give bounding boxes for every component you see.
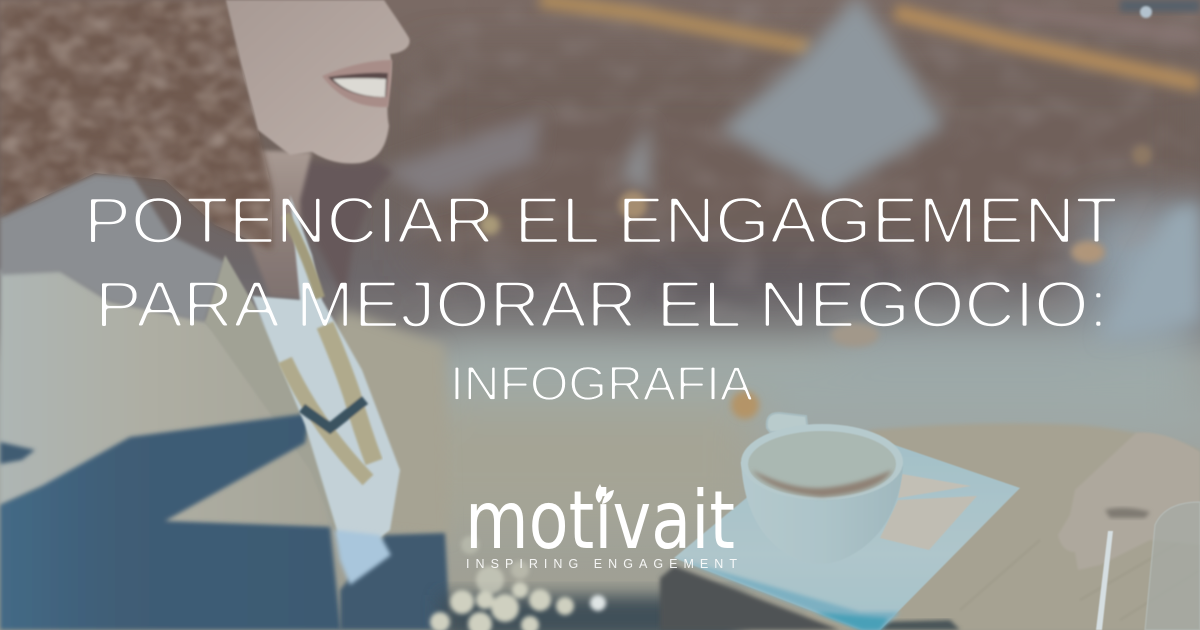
mouth and teeth [322, 60, 392, 107]
neck [245, 150, 312, 298]
translucent lapel [205, 255, 345, 555]
tan reflection behind the woman [300, 310, 450, 540]
shadowed background right of neck [285, 160, 392, 300]
face [226, 0, 410, 163]
bokeh lights [480, 145, 1152, 419]
orange street streaks [540, 0, 1200, 84]
dark wooden table edge [660, 566, 840, 630]
beaded necklace [285, 215, 374, 480]
wordmark: motivait [465, 474, 735, 567]
logo: motivait [465, 474, 737, 571]
beige sleeve [0, 268, 330, 527]
white shirt [252, 195, 400, 560]
cup handle [767, 413, 808, 432]
hand [1058, 433, 1200, 570]
tagline: INSPIRING ENGAGEMENT [466, 557, 737, 571]
photo: table, coffee cup and hand [660, 413, 1200, 630]
napkin [880, 474, 977, 550]
blurred light triangle reflection [380, 0, 1200, 340]
title line 1: POTENCIAR EL ENGAGEMENT [84, 183, 1118, 257]
subtitle: INFOGRAFIA [450, 358, 753, 411]
title [84, 183, 1118, 411]
hair [0, 0, 290, 260]
white flowers [430, 536, 606, 630]
square plate [674, 440, 1020, 630]
drinking straw [1096, 531, 1113, 630]
grey jacket shoulder [0, 172, 225, 322]
dark blue jacket [0, 413, 341, 630]
coffee cup [741, 462, 903, 564]
icon: leaves [596, 484, 614, 504]
title line 2: PARA MEJORAR EL NEGOCIO: [95, 267, 1108, 341]
round table [800, 423, 1200, 630]
water glass [1145, 502, 1200, 630]
photo: woman smiling [0, 0, 740, 630]
